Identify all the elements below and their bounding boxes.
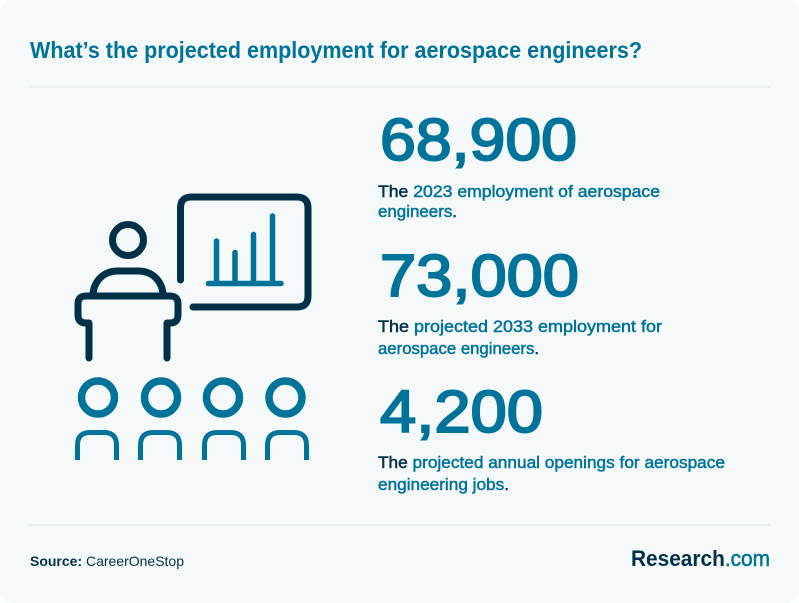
logo: Research.com: Research.com — [631, 546, 770, 571]
text: annual openings description — [378, 453, 725, 494]
title: What’s the projected employment for aerospace engineers? — [30, 37, 642, 63]
text: 2023 employment description — [378, 182, 660, 221]
text: projected 2033 employment description: The projected 2033 employment for — [378, 317, 662, 336]
text: 2023 employment description: The 2023 employment of aerospace — [378, 182, 660, 201]
source note: Source: CareerOneStop — [30, 553, 184, 569]
icon: presenter at podium with chart and audience — [78, 197, 308, 460]
text: projected 2033 employment description: aerospace engineers. — [378, 339, 539, 358]
text: 2023 employment description: engineers. — [378, 202, 457, 221]
stat: 73,000: 73,000 — [380, 243, 579, 309]
icon: audience — [78, 381, 306, 460]
text: projected 2033 employment description — [378, 317, 662, 358]
text: annual openings description: engineering jobs. — [378, 475, 509, 494]
icon: presentation board — [180, 197, 308, 307]
icon: bar chart on board — [208, 216, 281, 284]
icon: presenter — [78, 224, 178, 358]
text: annual openings description: The projected annual openings for aerospace — [378, 453, 725, 472]
stat: 4,200: 4,200 — [380, 379, 543, 445]
stat: 68,900: 68,900 — [380, 107, 577, 173]
